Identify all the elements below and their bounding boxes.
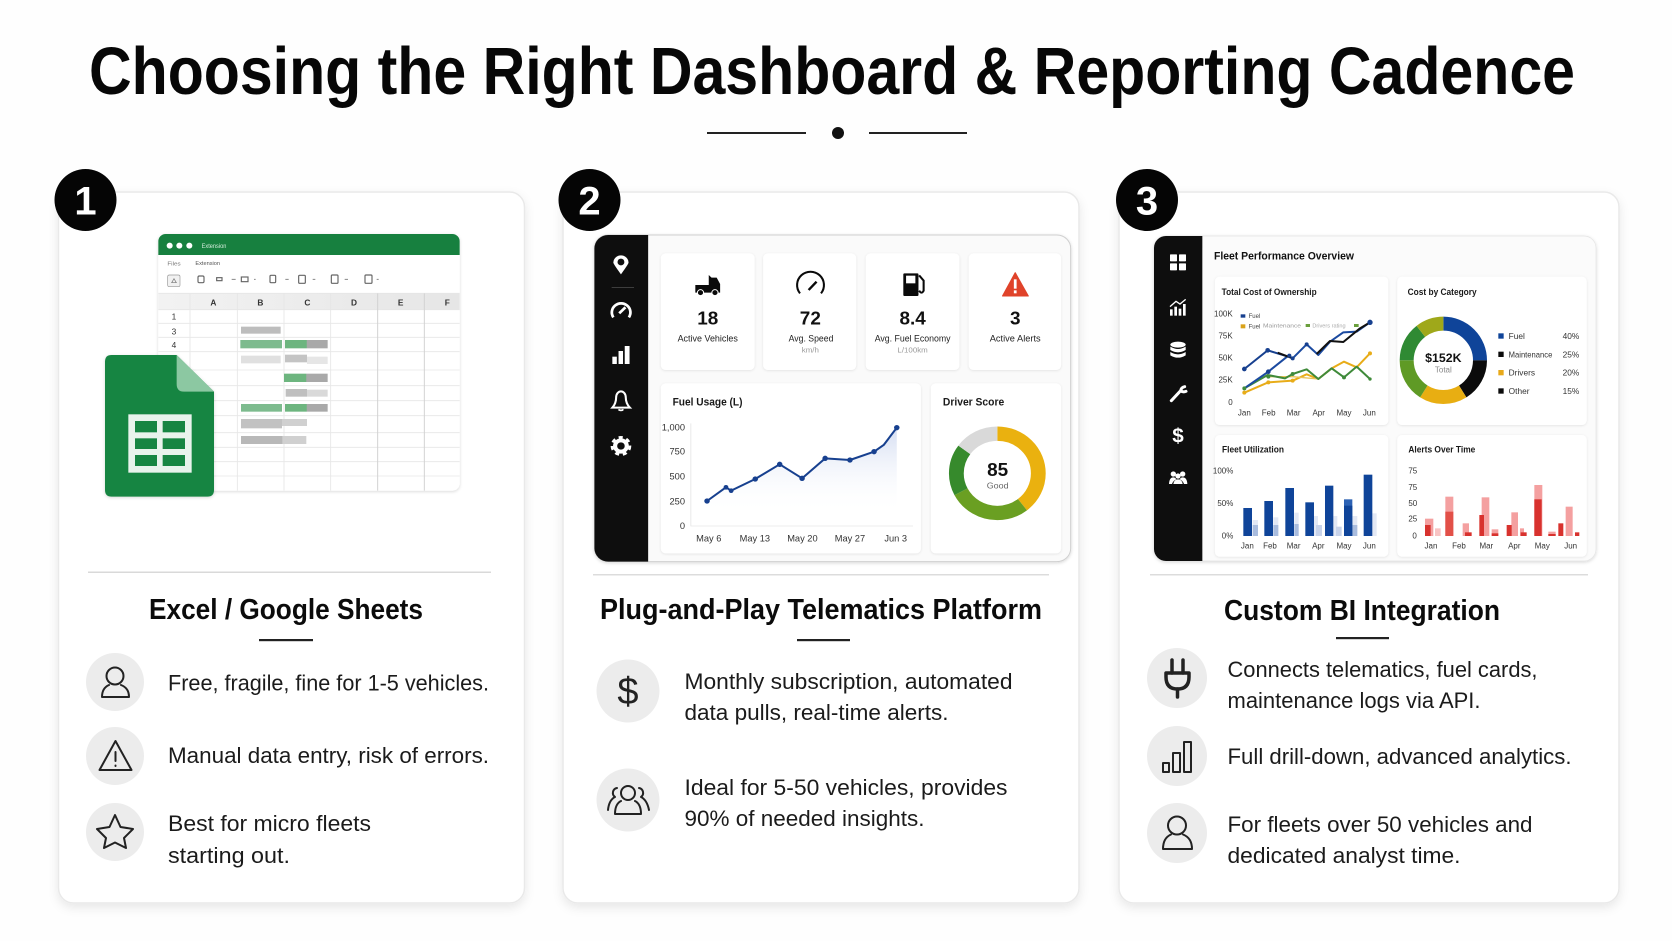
donut: cost by category: Cost by Category	[1408, 287, 1477, 297]
line chart: total cost of ownership: 25K	[1218, 376, 1233, 385]
KPI: fuel economy: 8.4	[899, 308, 926, 329]
bullet: free	[86, 653, 489, 711]
donut: cost by category: $152K	[1425, 351, 1462, 365]
spreadsheet window	[158, 234, 460, 491]
KPI: active alerts: 3	[1010, 308, 1020, 329]
donut: cost by category	[1397, 277, 1587, 425]
donut: cost by category: Total	[1435, 365, 1452, 374]
line chart: total cost of ownership: Fuel	[1249, 324, 1260, 330]
bar chart: fleet utilization: 50%	[1217, 499, 1233, 508]
title divider	[707, 127, 967, 139]
bar chart: fleet utilization: Fleet Utilization	[1222, 445, 1284, 455]
bar chart: alerts over time: Apr	[1508, 542, 1521, 551]
bar chart: fleet utilization: Jun	[1363, 542, 1376, 551]
KPI: avg speed: 72	[800, 308, 821, 329]
number badge 1: 1	[74, 180, 97, 224]
line chart: total cost of ownership: Fuel	[1249, 314, 1260, 320]
heading underline	[797, 639, 850, 641]
bullet: subscription	[596, 660, 1012, 725]
bullet: ideal size	[596, 768, 1008, 832]
number badge 1	[54, 169, 116, 231]
line chart: fuel usage: Jun 3	[884, 533, 907, 543]
donut: cost by category: Fuel	[1509, 331, 1525, 341]
divider	[593, 574, 1049, 576]
donut: driver score: Driver Score	[943, 397, 1004, 409]
line chart: fuel usage: 500	[670, 472, 685, 482]
heading underline	[259, 639, 313, 641]
line chart: fuel usage: May 27	[835, 533, 865, 543]
KPI: active vehicles: 18	[697, 308, 718, 329]
KPI: fuel economy: L/100km	[897, 346, 928, 355]
bullet: manual	[86, 727, 489, 785]
line chart: total cost of ownership	[1214, 277, 1388, 425]
dark sidebar	[594, 235, 648, 562]
line chart: total cost of ownership: Jan	[1238, 408, 1251, 417]
line chart: fuel usage: Fuel Usage (L)	[673, 397, 743, 409]
bullet: subscription: Monthly subscription, automated	[684, 669, 1012, 694]
line chart: total cost of ownership: 100K	[1214, 310, 1233, 319]
donut: driver score	[931, 383, 1061, 553]
line chart: total cost of ownership: 50K	[1218, 354, 1233, 363]
KPI: active alerts: Active Alerts	[990, 334, 1041, 344]
panel: telematics platform	[558, 169, 1079, 903]
bullet: large fleets: For fleets over 50 vehicles and	[1228, 812, 1532, 837]
donut: cost by category: Other	[1509, 386, 1530, 396]
KPI: active alerts	[969, 253, 1061, 370]
KPI: fuel economy	[866, 253, 959, 370]
bullet: micro fleets	[86, 803, 371, 868]
heading: Custom BI Integration	[1224, 595, 1500, 627]
bar chart: alerts over time: Jun	[1564, 542, 1577, 551]
line chart: fuel usage: May 20	[787, 533, 818, 543]
bar chart: alerts over time: May	[1535, 542, 1550, 551]
KPI: avg speed	[763, 253, 856, 370]
spreadsheet window: Files	[167, 261, 181, 267]
bar chart: fleet utilization: May	[1336, 542, 1352, 551]
number badge 2	[558, 169, 620, 231]
donut: cost by category: Drivers	[1509, 368, 1535, 378]
bullet: connects: maintenance logs via API.	[1228, 688, 1480, 713]
donut: cost by category: 25%	[1563, 349, 1580, 359]
dashboard frame	[594, 235, 1071, 562]
line chart: total cost of ownership: Drivers rating	[1312, 323, 1346, 329]
donut: driver score: 85	[987, 459, 1008, 480]
spreadsheet window: 4	[172, 340, 177, 350]
bar chart: alerts over time: Jan	[1425, 542, 1437, 551]
line chart: fuel usage: 750	[670, 447, 685, 457]
heading: Plug-and-Play Telematics Platform	[600, 594, 1042, 626]
dark sidebar	[1154, 236, 1202, 561]
number badge 3	[1116, 169, 1178, 231]
KPI: avg speed: Avg. Speed	[789, 334, 833, 344]
line chart: total cost of ownership: 0	[1228, 398, 1233, 407]
bar chart: alerts over time: 0	[1412, 532, 1417, 541]
bar chart: fleet utilization: Mar	[1287, 542, 1301, 551]
bar chart: fleet utilization: Feb	[1263, 542, 1277, 551]
line chart: fuel usage: May 6	[696, 533, 721, 543]
line chart: fuel usage: 250	[670, 497, 685, 507]
spreadsheet illustration	[105, 234, 460, 497]
bar chart: alerts over time: Alerts Over Time	[1408, 445, 1475, 455]
heading underline	[1336, 637, 1389, 639]
bar chart: alerts over time: 75	[1408, 483, 1418, 492]
line chart: total cost of ownership: Maintenance	[1263, 324, 1301, 330]
bullet: ideal size: 90% of needed insights.	[684, 806, 924, 831]
bullet: drill-down: Full drill-down, advanced analytics.	[1228, 744, 1572, 769]
panel: custom BI	[1116, 169, 1619, 903]
spreadsheet window: F	[445, 297, 450, 307]
bullet: subscription: $	[617, 671, 639, 713]
spreadsheet window: C	[304, 297, 310, 307]
telematics dashboard mockup	[594, 235, 1071, 562]
bullet: free: Free, fragile, fine for 1-5 vehicles.	[168, 670, 489, 696]
spreadsheet window: Extension	[202, 243, 227, 250]
KPI: fuel economy: Avg. Fuel Economy	[875, 334, 951, 344]
donut: cost by category: Maintenance	[1509, 349, 1553, 359]
line chart: total cost of ownership: Jun	[1363, 408, 1376, 417]
bar chart: alerts over time	[1397, 435, 1587, 557]
bar chart: alerts over time: 75	[1408, 467, 1418, 476]
donut: cost by category: 15%	[1563, 386, 1580, 396]
donut: cost by category: 40%	[1563, 331, 1580, 341]
spreadsheet window: B	[257, 297, 263, 307]
bar chart: fleet utilization: 100%	[1213, 467, 1233, 476]
bullet: manual: Manual data entry, risk of errors.	[168, 743, 489, 768]
number badge 3: 3	[1136, 180, 1158, 224]
bullet: micro fleets: starting out.	[168, 843, 290, 868]
dashboard frame	[1154, 236, 1596, 561]
KPI: avg speed: km/h	[802, 346, 819, 355]
card 3 background	[1119, 192, 1619, 903]
bar chart: fleet utilization: 0%	[1222, 531, 1233, 540]
divider	[1150, 574, 1588, 576]
KPI: active vehicles: Active Vehicles	[678, 334, 738, 344]
bar chart: alerts over time: Mar	[1479, 542, 1494, 551]
spreadsheet window: A	[210, 297, 216, 307]
donut: cost by category: 20%	[1563, 368, 1580, 378]
card 2 background	[563, 192, 1079, 903]
spreadsheet window: 3	[172, 326, 177, 336]
dashboard title: Fleet Performance Overview	[1214, 250, 1354, 262]
spreadsheet window: 1	[172, 312, 177, 322]
bullet: large fleets	[1147, 803, 1532, 868]
icon: google sheets file	[105, 355, 214, 497]
bullet: drill-down	[1147, 726, 1572, 786]
spreadsheet window: E	[398, 297, 404, 307]
heading: Excel / Google Sheets	[149, 594, 423, 626]
bar chart: alerts over time: 25	[1408, 514, 1418, 523]
line chart: total cost of ownership: Apr	[1312, 408, 1325, 417]
line chart: total cost of ownership: Total Cost of Ownership	[1222, 287, 1317, 297]
line chart: fuel usage: 0	[680, 521, 685, 531]
line chart: total cost of ownership: Mar	[1287, 408, 1301, 417]
card 1 background	[58, 192, 524, 903]
bullet: micro fleets: Best for micro fleets	[168, 811, 371, 836]
line chart: total cost of ownership: Feb	[1262, 408, 1276, 417]
bullet: ideal size: Ideal for 5-50 vehicles, provides	[684, 775, 1008, 800]
line chart: fuel usage: 1,000	[662, 422, 685, 432]
bullet: connects	[1147, 648, 1538, 713]
BI dashboard mockup	[1154, 236, 1596, 561]
bar chart: fleet utilization	[1213, 435, 1388, 557]
line chart: fuel usage: May 13	[740, 533, 770, 543]
line chart: total cost of ownership: May	[1336, 408, 1352, 417]
line chart: fuel usage	[661, 383, 921, 553]
KPI: active vehicles	[661, 253, 755, 370]
donut: driver score: Good	[987, 481, 1009, 491]
bar chart: alerts over time: Feb	[1452, 542, 1466, 551]
dark sidebar: $	[1172, 424, 1184, 447]
divider	[88, 572, 491, 573]
panel: excel / google sheets	[54, 169, 524, 903]
bar chart: alerts over time: 50	[1408, 499, 1418, 508]
bar chart: fleet utilization: Apr	[1312, 542, 1325, 551]
bullet: subscription: data pulls, real-time alerts.	[684, 700, 948, 725]
bullet: large fleets: dedicated analyst time.	[1228, 843, 1460, 868]
bar chart: fleet utilization: Jan	[1241, 542, 1254, 551]
line chart: total cost of ownership: 75K	[1218, 332, 1233, 341]
number badge 2: 2	[578, 180, 601, 224]
spreadsheet window: D	[351, 297, 357, 307]
spreadsheet window: Extension	[195, 261, 220, 267]
bullet: connects: Connects telematics, fuel cards,	[1228, 657, 1538, 682]
